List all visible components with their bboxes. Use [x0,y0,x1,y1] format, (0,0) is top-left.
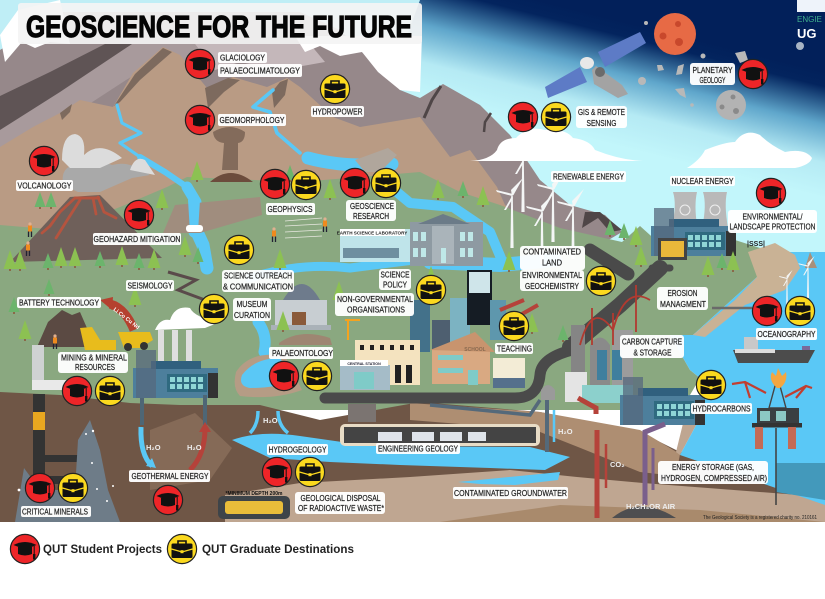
water and carbon dioxide labels: H₂O [558,427,573,436]
label: gis and remote sensing: GIS & REMOTE [578,107,625,117]
label: non-governmental organisations: NON-GOVERNMENTAL [337,294,413,304]
water and carbon dioxide labels [558,427,625,469]
offshore oil platform [732,368,812,505]
earth science laboratory: EARTH SCIENCE LABORATORY [337,230,407,236]
label: energy storage [658,461,768,484]
label: environmental geochemistry [520,270,584,291]
aquifer [232,434,570,485]
label: carbon capture and storage: & STORAGE [634,348,672,358]
label: palaeontology: PALAEONTOLOGY [272,348,333,358]
volcano [10,134,162,262]
sky background [0,0,825,300]
label: geothermal energy [129,470,210,482]
dam [355,148,397,172]
inner lagoon [241,358,292,388]
label: contaminated groundwater: CONTAMINATED GROUNDWATER [454,488,567,498]
label: carbon capture and storage: CARBON CAPTURE [622,336,682,346]
gas storage cavern [612,502,676,518]
label: geoscience research: RESEARCH [353,211,389,221]
label: critical minerals: CRITICAL MINERALS [22,506,88,516]
offshore wind turbines [779,256,815,305]
label: engineering geology: ENGINEERING GEOLOGY [378,444,458,454]
label: planetary geology: GEOLOGY [700,75,726,85]
label: contaminated land: CONTAMINATED [523,246,581,256]
title banner: GEOSCIENCE FOR THE FUTURE [26,9,412,44]
radioactive waste repository [218,491,290,519]
green land [0,172,760,410]
label: gis and remote sensing: SENSING [586,118,616,128]
mountains: grey back range [0,12,622,245]
label: geophysics: GEOPHYSICS [268,204,313,214]
metro tunnel [340,404,540,446]
label: mining and mineral resources: RESOURCES [75,362,115,372]
cliff and waterfall [163,197,262,233]
critical mineral deposit [15,420,120,522]
logos: ENGIE [797,15,822,24]
red student project badges [25,49,786,515]
label: teaching: TEACHING [497,344,532,354]
labels [16,52,817,517]
snow caps [0,0,422,92]
satellite [545,32,646,98]
label: gis and remote sensing [576,106,627,128]
moon [716,90,746,120]
element arrow: Li Co Cu Nd [112,307,140,331]
label: mining and mineral resources [58,352,128,373]
label: hydrogeology: HYDROGEOLOGY [268,444,327,454]
label: environmental geochemistry: ENVIRONMENTAL [522,270,582,280]
geothermal water arrows: H₂O [187,443,202,452]
label: carbon capture and storage [620,335,684,358]
label: science outreach and communication [222,270,294,292]
label: seismology: SEISMOLOGY [128,280,173,290]
dark mountain facets [60,48,288,120]
label: contaminated land: LAND [542,258,562,268]
yellow graduate destination badges [58,74,815,503]
label: geological disposal of radioactive waste: GEOLOGICAL DISPOSAL [300,493,381,503]
label: palaeoclimatology: PALAEOCLIMATOLOGY [220,66,300,76]
label: hydrocarbons: HYDROCARBONS [692,404,751,414]
left sky [0,0,420,110]
planet mars [654,13,696,55]
label: museum curation: CURATION [234,310,270,320]
sea [670,252,825,505]
pipes [430,300,665,518]
seismic fault [168,272,205,300]
label: museum curation: MUSEUM [236,299,268,309]
ship [733,337,815,363]
legend: QUT Student Projects [43,542,162,556]
earth science laboratory [337,229,415,262]
label: volcanology: VOLCANOLOGY [18,180,72,190]
central station and old town: CENTRAL STATION [347,362,381,366]
gas storage cavern: H₂CH₄OR AIR [626,502,676,511]
rock fall [210,127,253,182]
label: nuclear energy: NUCLEAR ENERGY [672,176,734,186]
lagoon [235,355,302,397]
mountains: brown front range [0,47,530,250]
coastal headland: |SSS| [747,241,765,248]
label: erosion management [657,287,708,310]
logos [796,0,825,50]
white legend strip [0,523,825,599]
label: geothermal energy: GEOTHERMAL ENERGY [132,471,209,481]
label: renewable energy: RENEWABLE ENERGY [553,172,624,182]
school: SCHOOL [464,347,486,353]
well head [541,385,555,400]
mine [37,310,153,351]
asteroids [638,21,748,107]
label: science policy: POLICY [383,280,407,290]
fossil [279,334,332,345]
label: planetary geology [690,63,735,85]
label: geohazard mitigation: GEOHAZARD MITIGATION [94,234,180,244]
geothermal water arrows: H₂O [146,443,161,452]
label: geomorphology: GEOMORPHOLOGY [220,115,285,125]
bridge [580,285,650,345]
label: non-governmental organisations [335,293,414,316]
road [325,250,670,398]
water and carbon dioxide labels: CO₂ [610,460,625,469]
school [430,332,525,388]
geophysics survey [272,217,327,242]
label: non-governmental organisations: ORGANISATIONS [347,304,405,314]
label: erosion management: EROSION [668,288,698,298]
logos: UG [797,26,816,41]
museum [271,284,331,330]
hydrogeology arrows: H₂O [263,416,278,425]
label: energy storage: HYDROGEN, COMPRESSED AIR) [661,473,767,483]
label: energy storage: ENERGY STORAGE (GAS, [672,462,754,472]
label: erosion management: MANAGMENT [660,299,706,309]
university [410,214,483,266]
label: mining and mineral resources: MINING & MINERAL [61,352,127,362]
label: science outreach and communication: & COMMUNICATION [223,282,293,292]
label: palaeontology [269,347,333,359]
wind turbines [496,142,584,264]
label: environmental landscape protection [728,210,817,233]
label: glaciology: GLACIOLOGY [220,52,265,62]
trees [4,161,740,342]
label: geological disposal of radioactive waste [295,492,385,514]
legend: QUT Graduate Destinations [202,542,354,556]
nuclear power station [651,192,736,260]
carbon capture plant [565,325,633,403]
coastal headland [693,241,817,337]
city towers [410,270,506,352]
label: geological disposal of radioactive waste: OF RADIOACTIVE WASTE* [298,503,385,513]
element arrow [100,297,140,331]
underground strata [0,392,825,522]
legend [10,534,354,564]
label: museum curation [233,298,271,321]
geothermal water arrows [141,422,211,470]
clouds [470,129,812,168]
label: science policy: SCIENCE [380,270,410,280]
hydrogeology arrows [250,411,288,433]
label: hydropower: HYDROPOWER [312,106,362,116]
label: science outreach and communication: SCIENCE OUTREACH [224,270,292,280]
label: geoscience research: GEOSCIENCE [350,201,394,211]
label: contaminated land [520,246,585,270]
geothermal plant [133,308,220,425]
rivers and lakes [117,90,555,352]
radioactive waste repository: *MINIMUM DEPTH 200m [226,491,283,497]
label: geoscience research [346,200,396,221]
hydrocarbon site building [620,377,705,425]
label: science policy [379,269,411,290]
label: battery technology: BATTERY TECHNOLOGY [19,298,99,308]
mine headframe and shaft [32,345,89,486]
label: palaeoclimatology [218,64,302,77]
label: environmental geochemistry: GEOCHEMISTRY [525,281,579,291]
central station and old town [340,320,420,390]
label: planetary geology: PLANETARY [692,65,733,75]
label: environmental landscape protection: ENVIRONMENTAL/ [742,212,803,222]
